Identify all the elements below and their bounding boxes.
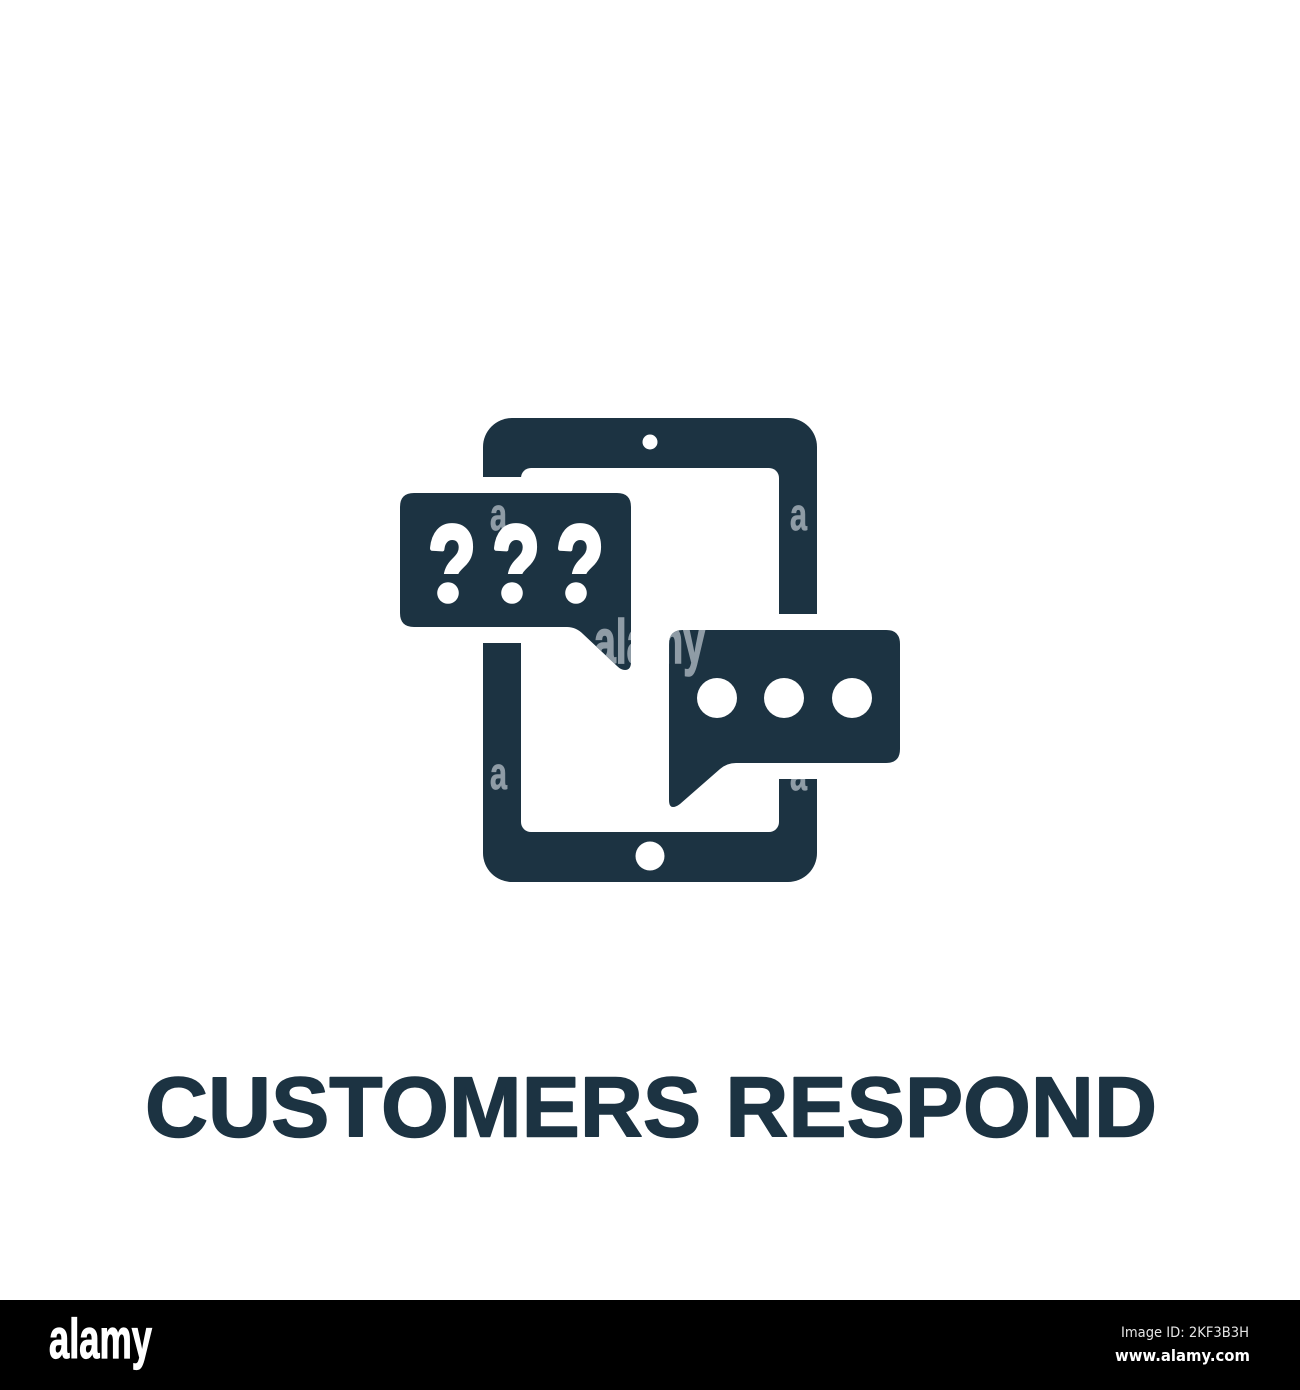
website: www.alamy.com bbox=[1115, 1346, 1250, 1365]
image id: Image ID: 2KF3B3H bbox=[1121, 1325, 1249, 1341]
watermark on bubbles: alamy bbox=[594, 608, 705, 677]
icon: tablet with speech bubbles bbox=[400, 418, 900, 882]
footer logo: alamy bbox=[49, 1307, 152, 1370]
question marks: ? bbox=[428, 503, 476, 624]
watermark letters on tablet: a bbox=[790, 490, 807, 541]
speech bubble: questions bbox=[400, 493, 631, 670]
watermark on bubbles bbox=[490, 490, 705, 677]
question marks: ? bbox=[556, 503, 604, 624]
footer bar bbox=[0, 1300, 1300, 1390]
title: CUSTOMERS RESPOND bbox=[145, 1060, 1157, 1156]
typing dots bbox=[697, 678, 872, 718]
watermark on bubbles: a bbox=[490, 490, 507, 541]
question marks: ? bbox=[492, 503, 540, 624]
tablet body bbox=[470, 418, 830, 882]
infographic canvas bbox=[0, 418, 1300, 1390]
question marks bbox=[430, 523, 602, 604]
speech bubble: typing bbox=[669, 630, 900, 807]
watermark letters on tablet: a bbox=[490, 749, 507, 800]
watermark letters on tablet bbox=[490, 490, 807, 801]
watermark letters on tablet: a bbox=[790, 750, 807, 801]
